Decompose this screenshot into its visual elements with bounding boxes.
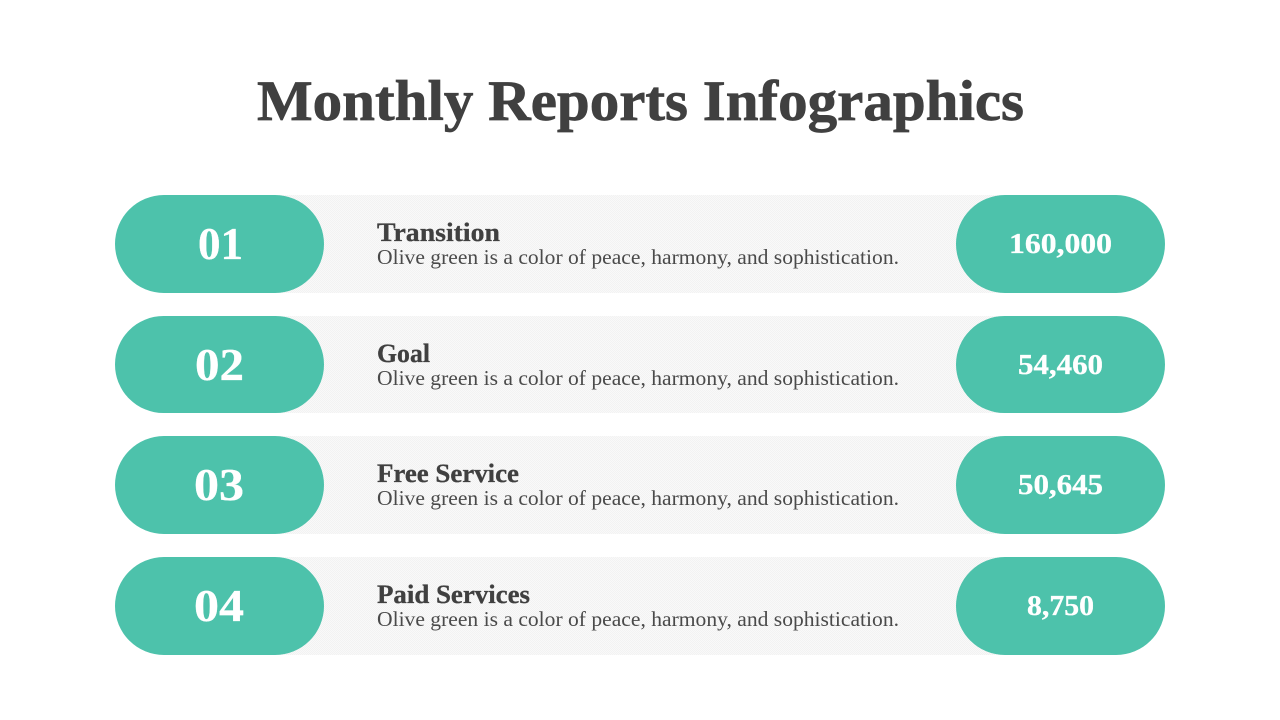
row 3 heading: Free Service	[377, 459, 519, 488]
row 3 number: 03	[194, 460, 244, 510]
row 1 number: 01	[198, 219, 243, 269]
row 4 heading: Paid Services	[377, 580, 530, 609]
row 2 heading: Goal	[377, 339, 430, 368]
row 2 background band	[270, 316, 1010, 413]
row 1 description: Olive green is a color of peace, harmony, and sophistication.	[377, 245, 899, 269]
row 1: Transition	[115, 195, 1165, 293]
row 1 value pill	[956, 195, 1165, 293]
row 4 value: 8,750	[1027, 591, 1094, 622]
row 2 value pill	[956, 316, 1165, 413]
row 2 value: 54,460	[1018, 350, 1103, 381]
row 3 background band	[270, 436, 1010, 534]
row 1 value: 160,000	[1009, 229, 1112, 260]
row 3 value: 50,645	[1018, 470, 1103, 501]
row 4 number: 04	[194, 581, 244, 631]
row 2 description: Olive green is a color of peace, harmony, and sophistication.	[377, 366, 899, 390]
row 4: Paid Services	[115, 557, 1165, 655]
row 2 number pill	[115, 316, 324, 413]
row 2 number: 02	[195, 340, 244, 390]
row 1 background band	[270, 195, 1010, 293]
row 4 background band	[270, 557, 1010, 655]
row 3 number pill	[115, 436, 324, 534]
title: Monthly Reports Infographics	[257, 70, 1024, 133]
row 3 description: Olive green is a color of peace, harmony, and sophistication.	[377, 486, 899, 510]
row 1 heading: Transition	[377, 218, 501, 247]
row 3: Free Service	[115, 436, 1165, 534]
row 4 value pill	[956, 557, 1165, 655]
row 2: Goal	[115, 316, 1165, 413]
row 4 description: Olive green is a color of peace, harmony, and sophistication.	[377, 607, 899, 631]
row 1 number pill	[115, 195, 324, 293]
row 3 value pill	[956, 436, 1165, 534]
row 4 number pill	[115, 557, 324, 655]
